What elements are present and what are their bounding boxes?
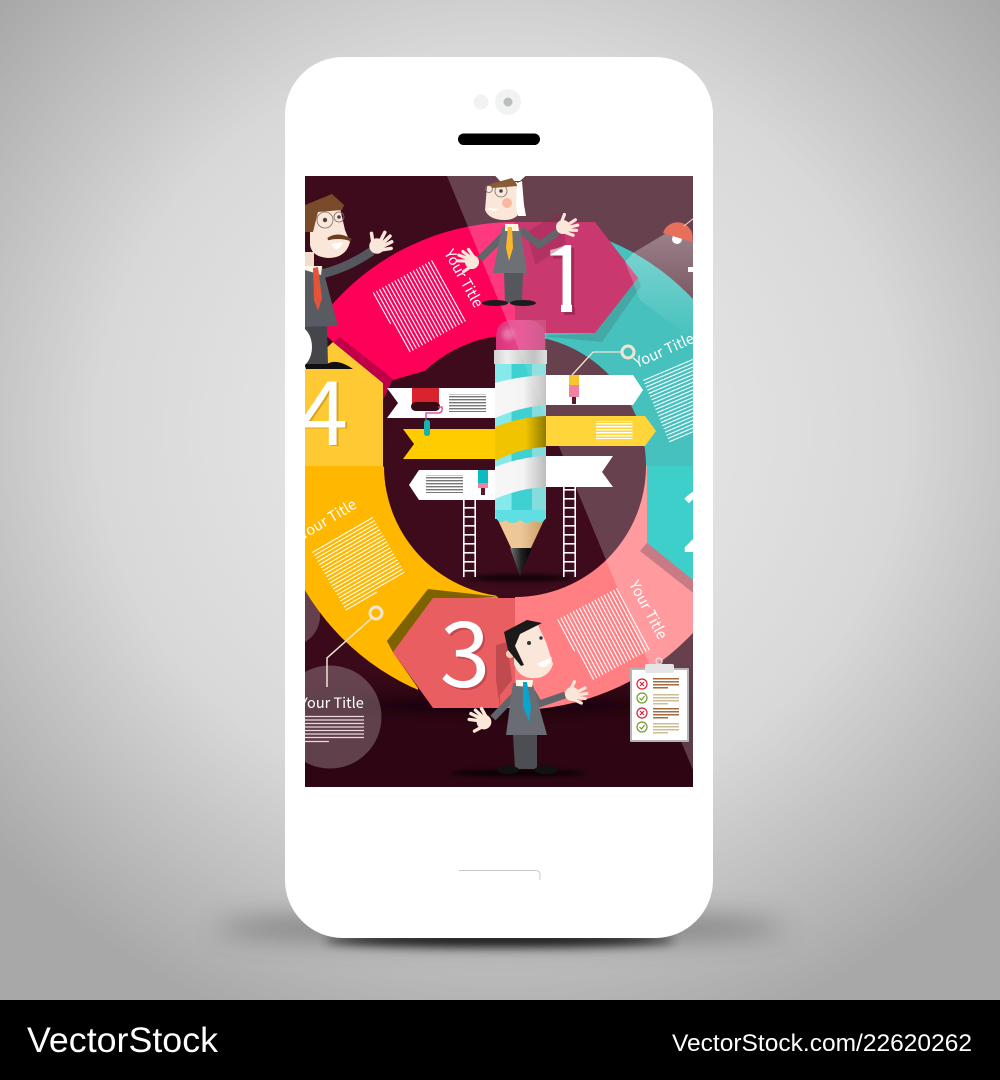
white circle [286, 327, 312, 367]
salmon body lines [558, 588, 649, 681]
light cone [625, 234, 693, 326]
smile [487, 208, 499, 211]
glasses [486, 185, 507, 197]
jacket [506, 683, 547, 735]
jacket [493, 227, 527, 273]
phone camera [495, 89, 521, 115]
eraser highlight [502, 328, 514, 340]
background circle title [305, 606, 384, 768]
clipboard [630, 658, 689, 742]
flag text lower [426, 475, 463, 493]
phone sensor [474, 94, 488, 110]
segment salmon shadow [640, 543, 693, 593]
number 1 [550, 245, 575, 315]
hexagon three [393, 598, 515, 708]
segment pink [327, 222, 515, 380]
connector ring [370, 607, 382, 619]
clip [645, 658, 674, 673]
businessman top [455, 170, 581, 306]
item lines [653, 678, 679, 734]
segment yellow [305, 466, 498, 690]
face [310, 208, 350, 258]
screen background [305, 176, 693, 787]
number 2: 2 [681, 452, 729, 577]
collar [505, 224, 519, 231]
shoes [482, 300, 536, 306]
arms [480, 230, 558, 259]
hands [467, 707, 493, 733]
ground shadow [360, 699, 640, 713]
top white overlap [490, 170, 532, 181]
pencil [494, 320, 547, 576]
bottom bar [0, 1000, 1000, 1080]
legs [305, 325, 328, 365]
teal title: Your Title [630, 327, 697, 373]
eyes [323, 215, 341, 222]
number 4: 4 [301, 343, 350, 472]
flag right gold [546, 416, 656, 446]
ribbon white lower [495, 456, 546, 499]
collar [305, 266, 322, 275]
neck [305, 252, 314, 268]
tie [523, 682, 531, 722]
pencil scallops [495, 510, 546, 523]
connector line [327, 617, 373, 687]
ear [506, 650, 514, 658]
pink body lines [373, 260, 465, 354]
paper [632, 670, 687, 740]
hexagon one [515, 222, 638, 333]
jacket [300, 266, 338, 327]
white hair side [516, 181, 526, 216]
face [514, 625, 553, 678]
flag right lower white [546, 456, 613, 487]
number 1: 1 [542, 207, 594, 343]
paint roller [411, 388, 442, 436]
pencil lead [510, 548, 532, 576]
pink hexagon shadow [540, 278, 641, 342]
tie [506, 227, 513, 261]
hair [490, 178, 518, 188]
pencil eraser [496, 320, 545, 350]
eye [499, 189, 503, 193]
head [485, 182, 522, 220]
hair [305, 194, 344, 232]
brush lower [478, 470, 488, 495]
left ladder [463, 500, 476, 577]
pink shadow band [333, 337, 393, 400]
businessman left [286, 194, 392, 369]
teal body lines [643, 359, 693, 442]
legs [513, 735, 537, 769]
eyes [527, 636, 543, 645]
board [630, 668, 689, 742]
shoes [306, 362, 353, 369]
small mark [688, 267, 693, 272]
legs [504, 272, 523, 303]
salmon title: Your Title [624, 576, 673, 643]
phone body [285, 57, 713, 938]
pencil light streak [507, 320, 546, 418]
number 4 [305, 382, 348, 446]
smile [537, 657, 552, 667]
right ladder [563, 474, 576, 577]
brand left: VectorStock [27, 1021, 219, 1060]
tie [313, 267, 322, 311]
glasses [317, 212, 344, 228]
number 3 [442, 621, 488, 690]
pencil body [495, 363, 546, 519]
circle title text: Your Title [299, 692, 364, 713]
brush top [569, 346, 634, 404]
smile [331, 242, 343, 249]
yellow hexagon four [305, 342, 383, 466]
pencil wood [497, 518, 545, 550]
number 1: 1 [539, 204, 591, 340]
hair [504, 620, 542, 666]
yellow title: Your Title [294, 493, 360, 545]
number 4: 4 [299, 342, 348, 471]
body shadow [496, 642, 512, 708]
lamp [663, 218, 694, 244]
ring segments [305, 222, 693, 709]
number 3: 3 [440, 582, 490, 714]
ribbon white top [495, 375, 546, 418]
number 3: 3 [442, 584, 492, 716]
hand [369, 231, 392, 255]
flag left lower white [409, 470, 495, 500]
flag text gold [596, 421, 632, 439]
cheek [502, 198, 512, 208]
phone speaker [458, 134, 540, 145]
yellow body lines [312, 518, 406, 610]
home button [459, 870, 540, 880]
light beam [447, 176, 693, 770]
flag right white [546, 375, 643, 405]
moustache [328, 236, 351, 240]
arms [493, 692, 565, 718]
ribbon gold [495, 416, 546, 461]
flag left gold [403, 429, 495, 459]
businessman bottom [450, 620, 590, 776]
status icons [637, 679, 647, 732]
pencil shadow [468, 574, 572, 582]
flag left white [387, 388, 495, 418]
phone shadow [215, 912, 785, 947]
image url: VectorStock.com/22620262 [672, 1030, 972, 1057]
inner circle [384, 335, 646, 597]
man shadow [527, 212, 566, 265]
screen [305, 176, 693, 787]
hands [455, 247, 481, 273]
flag text top [449, 394, 486, 412]
pencil ferrule [494, 350, 547, 364]
segment teal [544, 241, 693, 580]
background circle small [305, 590, 320, 642]
arm [318, 251, 372, 275]
feet shadow [450, 770, 586, 776]
circle body lines [305, 716, 364, 742]
olive shadow [387, 589, 500, 652]
segment salmon [515, 466, 693, 709]
collar [516, 680, 533, 687]
shoes [497, 766, 558, 774]
pink title: Your Title [439, 244, 489, 311]
